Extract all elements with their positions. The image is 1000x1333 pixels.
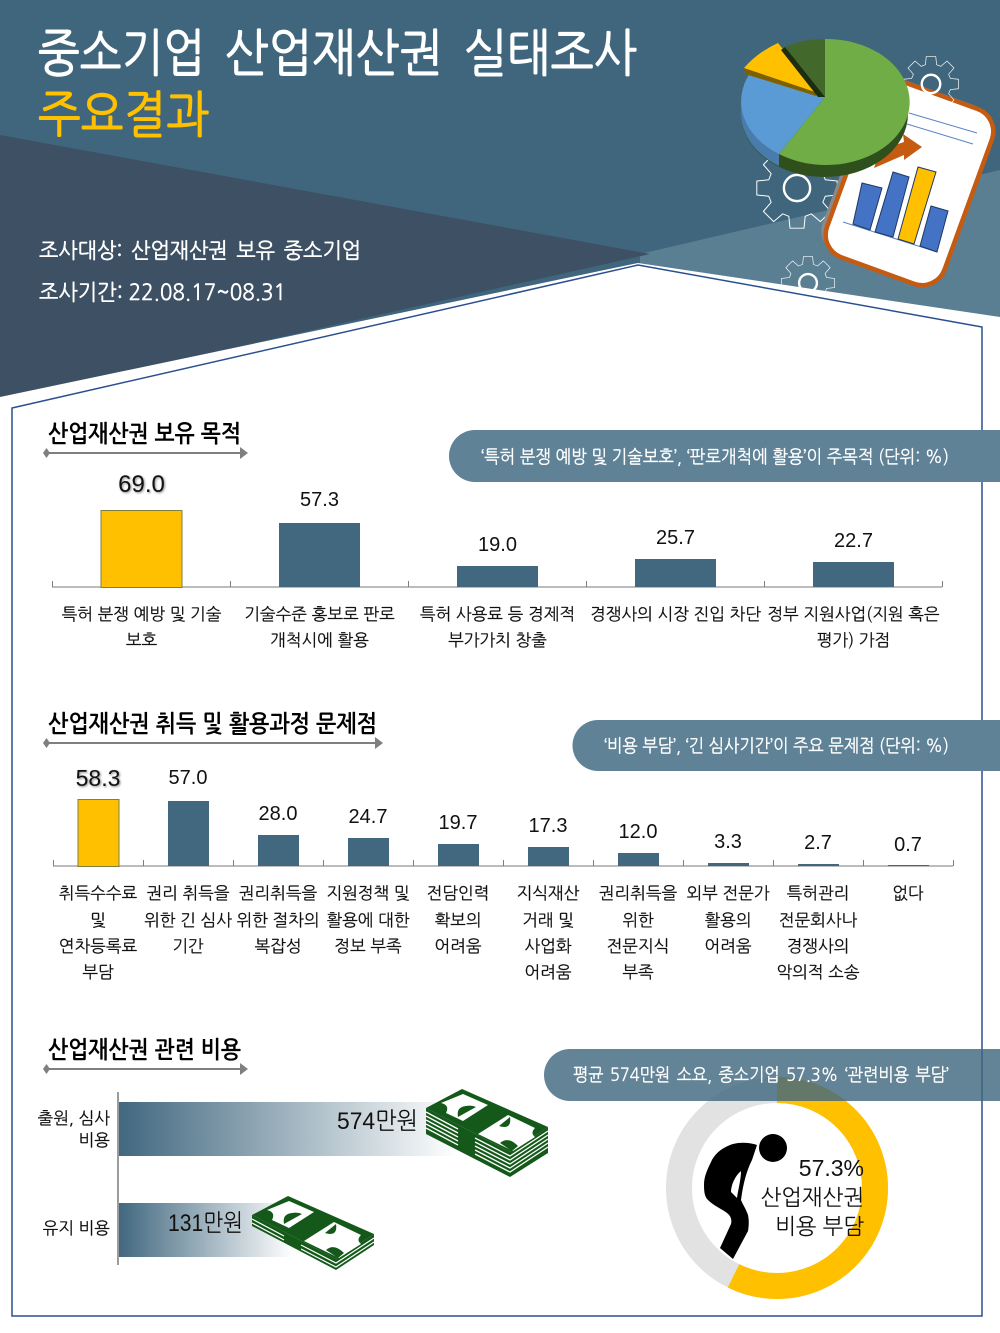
bar chart: problems: 2.7 xyxy=(804,832,832,854)
heading arrow xyxy=(43,1063,248,1075)
bar chart: problems: 위한 절차의 xyxy=(236,912,320,929)
bar chart: problems: 외부 전문가 xyxy=(686,885,770,902)
callout: ownership purpose: ‘특허 분쟁 예방 및 기술보호’, ‘판로개척에 활용’이 주목적 (단위: %) xyxy=(481,447,949,466)
cost bar: application and examination: 비용 xyxy=(79,1132,110,1149)
bar chart: ownership purpose: 경쟁사의 시장 진입 차단 xyxy=(590,606,761,623)
bar chart: ownership purpose: 특허 사용료 등 경제적 xyxy=(420,606,575,623)
bar chart: problems: 기간 xyxy=(172,938,204,955)
bar chart: problems: 24.7 xyxy=(349,806,387,828)
bar chart: problems: 정보 부족 xyxy=(334,938,402,955)
survey details: 조사대상: 산업재산권 보유 중소기업 xyxy=(39,240,361,262)
icon: gear lower xyxy=(782,257,834,309)
title xyxy=(38,28,637,140)
bar chart: ownership purpose: 19.0 xyxy=(478,534,517,556)
heading: problems: 산업재산권 취득 및 활용과정 문제점 xyxy=(48,711,377,736)
bar chart: ownership purpose: 부가가치 창출 xyxy=(448,632,547,649)
bar chart: ownership purpose: 정부 지원사업(지원 혹은 xyxy=(767,606,940,623)
cost axis xyxy=(117,1092,119,1265)
donut label: 57.3% xyxy=(799,1155,864,1181)
bar chart: problems: 전문지식 xyxy=(607,938,669,955)
callout: average cost: 평균 574만원 소요, 중소기업 57.3% ‘관련비용 부담’ xyxy=(573,1065,949,1084)
bar chart: problems: 어려움 xyxy=(434,938,482,955)
bar chart: problems: 17.3 xyxy=(529,815,567,837)
callout: problems xyxy=(572,720,1000,771)
bar chart: ownership purpose: 22.7 xyxy=(834,530,873,552)
bar chart: problems: 연차등록료 xyxy=(59,938,138,955)
icon: person bent under burden xyxy=(704,1134,787,1259)
bar chart: ownership purpose: 보호 xyxy=(126,632,157,649)
bar chart: problems: 지원정책 및 xyxy=(326,885,410,902)
icon: gear upper xyxy=(904,57,958,111)
bar chart: problems: 어려움 xyxy=(524,964,572,981)
bar chart: problems: 없다 xyxy=(892,885,924,902)
bar chart: problems: 12.0 xyxy=(619,821,657,843)
section: related costs xyxy=(38,1037,548,1270)
title: 실태조사 xyxy=(464,28,637,79)
title: 산업재산권 xyxy=(225,28,443,79)
bar chart: problems: 권리취득을 xyxy=(239,885,318,902)
bar chart: problems: 0.7 xyxy=(894,834,922,856)
section: ownership purpose xyxy=(43,421,1000,649)
bar chart: ownership purpose: 69.0 xyxy=(118,471,165,498)
bar chart: ownership purpose: 평가) 가점 xyxy=(817,632,890,649)
bar chart: problems: 활용에 대한 xyxy=(326,912,410,929)
bar chart: problems: 복잡성 xyxy=(254,938,302,955)
icon: 3D pie chart xyxy=(741,39,910,177)
bar chart: problems: 사업화 xyxy=(524,938,572,955)
icon: report clipboard with bar chart xyxy=(815,70,1000,292)
bar chart: problems: 특허관리 xyxy=(787,885,849,902)
icon: large money stack xyxy=(426,1089,548,1177)
bar chart: problems: 어려움 xyxy=(704,938,752,955)
bar chart: problems: 지식재산 xyxy=(517,885,580,902)
title: 중소기업 xyxy=(38,28,205,79)
bar chart: problems: 위한 xyxy=(622,912,654,929)
bar chart: problems: 19.7 xyxy=(439,812,477,834)
donut chart: 57.3% cost burden xyxy=(679,1090,875,1286)
survey details: 조사기간: 22.08.17~08.31 xyxy=(39,281,286,304)
bar chart: problems: 전문회사나 xyxy=(779,912,858,929)
cost bar: maintenance xyxy=(43,1203,293,1257)
bar chart: ownership purpose: 개척시에 활용 xyxy=(270,632,369,649)
survey details xyxy=(39,240,361,304)
callout: problems: ‘비용 부담’, ‘긴 심사기간’이 주요 문제점 (단위: %) xyxy=(604,736,949,755)
donut label: 비용 부담 xyxy=(775,1215,864,1238)
heading arrow xyxy=(43,447,248,459)
bar chart: ownership purpose: 25.7 xyxy=(656,527,695,549)
donut label xyxy=(761,1155,864,1238)
bar chart: problems: 부담 xyxy=(82,964,114,981)
cost bar: maintenance: 유지 비용 xyxy=(43,1220,110,1237)
callout: ownership purpose xyxy=(449,430,1000,482)
bar chart: problems: 전담인력 xyxy=(427,885,489,902)
bar chart: problems: 28.0 xyxy=(259,803,297,825)
section: acquisition and use problems xyxy=(43,711,1000,981)
bar chart: problems: 경쟁사의 xyxy=(787,938,849,955)
callout: average cost xyxy=(544,1049,1000,1101)
bar chart: problems: 부족 xyxy=(622,964,654,981)
bar chart: problems: 거래 및 xyxy=(522,912,574,929)
cost bar: application and examination: 574만원 xyxy=(337,1108,418,1135)
bar chart: problems: 확보의 xyxy=(434,912,482,929)
bar chart: problems: 3.3 xyxy=(714,831,742,853)
bar chart: ownership purpose: 기술수준 홍보로 판로 xyxy=(244,606,395,623)
bar chart: ownership purpose xyxy=(52,471,942,649)
header background xyxy=(0,0,1000,400)
bar chart: problems: 악의적 소송 xyxy=(776,964,860,981)
bar chart: problems xyxy=(53,765,954,981)
icon: gear left xyxy=(757,148,837,228)
heading: costs: 산업재산권 관련 비용 xyxy=(48,1037,241,1062)
heading: ownership purpose: 산업재산권 보유 목적 xyxy=(48,421,241,446)
donut label: 산업재산권 xyxy=(761,1186,864,1209)
heading arrow xyxy=(43,737,383,749)
bar chart: problems: 권리 취득을 xyxy=(146,885,230,902)
title: 주요결과 xyxy=(38,90,209,140)
bar chart: ownership purpose: 57.3 xyxy=(300,489,339,511)
bar chart: problems: 위한 긴 심사 xyxy=(144,912,232,929)
bar chart: ownership purpose: 특허 분쟁 예방 및 기술 xyxy=(62,606,222,623)
bar chart: problems: 58.3 xyxy=(76,765,120,791)
cost bar: application and examination xyxy=(38,1102,457,1156)
bar chart: problems: 57.0 xyxy=(169,767,207,789)
cost bar: application and examination: 출원, 심사 xyxy=(38,1110,110,1127)
content frame xyxy=(12,265,982,1316)
cost bar: maintenance: 131만원 xyxy=(168,1210,243,1237)
bar chart: problems: 및 xyxy=(90,912,106,929)
bar chart: problems: 활용의 xyxy=(704,912,752,929)
bar chart: problems: 권리취득을 xyxy=(599,885,678,902)
icon: small money stack xyxy=(252,1196,374,1270)
bar chart: problems: 취득수수료 xyxy=(59,885,138,902)
